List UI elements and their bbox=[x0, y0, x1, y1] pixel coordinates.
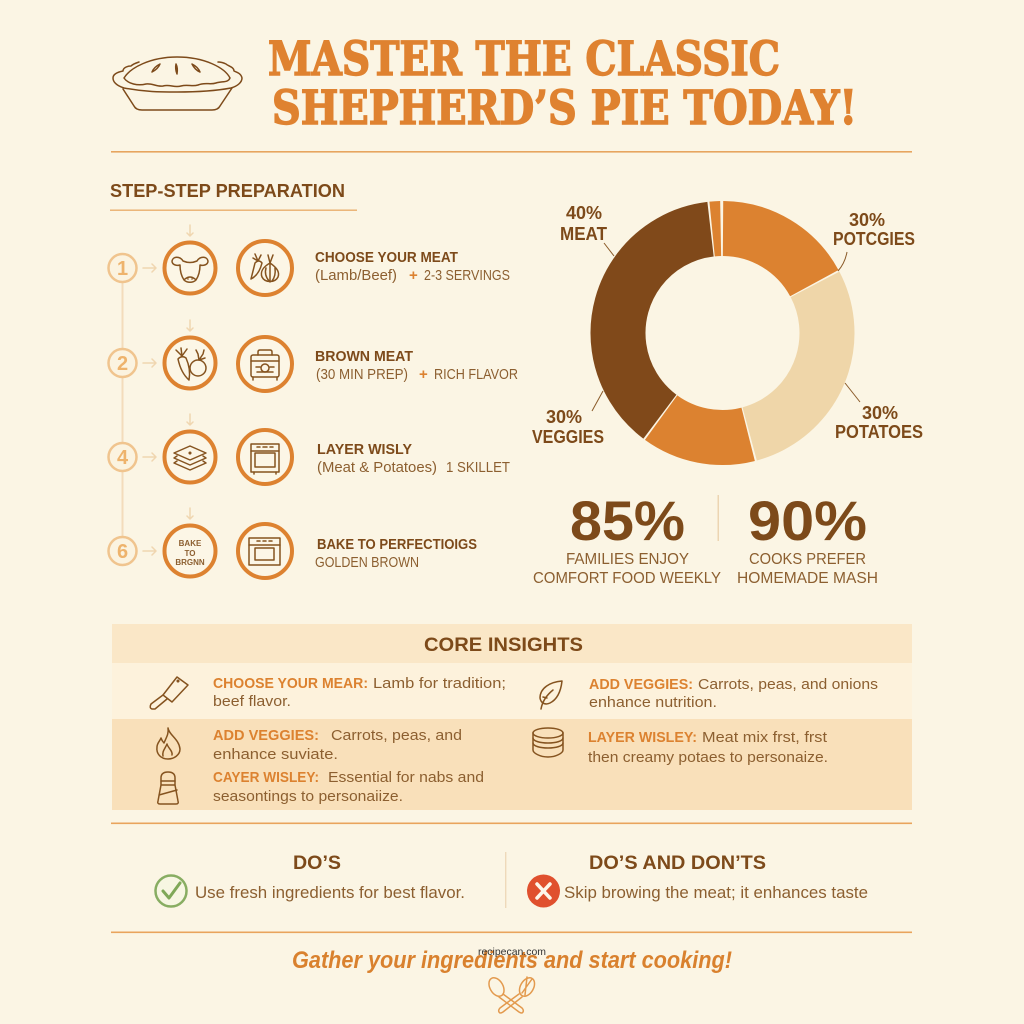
insight: add veggies right bbox=[589, 676, 878, 711]
icon: flame bbox=[157, 728, 180, 759]
insight: layer wisley: LAYER WISLEY: bbox=[588, 729, 697, 746]
step 2 text: + bbox=[419, 366, 428, 383]
icon: bake badge: TO bbox=[185, 549, 195, 558]
panel: step 2 bbox=[108, 320, 518, 391]
heading: do's and don'ts: DO’S AND DON’TS bbox=[589, 853, 766, 874]
watermark: recipecan.com bbox=[478, 946, 546, 958]
stat: 90 percent: COOKS PREFER bbox=[749, 551, 866, 568]
icon: cross bbox=[527, 874, 560, 908]
arrows step 3 bbox=[143, 414, 193, 461]
insight: add veggies left bbox=[213, 727, 462, 763]
heading: step preparation: STEP-STEP PREPARATION bbox=[110, 180, 345, 201]
insight: layer wisley bbox=[588, 729, 828, 766]
icon: stove bbox=[238, 430, 292, 484]
step 4 text: BAKE TO PERFECTIOIGS bbox=[317, 537, 477, 553]
stat: 85 percent: 85% bbox=[570, 489, 685, 552]
insight: cayer wisley bbox=[213, 769, 484, 805]
heading: core insights: CORE INSIGHTS bbox=[424, 634, 583, 656]
donut label: meat bbox=[560, 203, 614, 256]
insight: layer wisley: then creamy potaes to personaize. bbox=[588, 749, 828, 766]
insight: cayer wisley: CAYER WISLEY: bbox=[213, 769, 319, 786]
step 3 text bbox=[317, 442, 510, 476]
don't text: Skip browing the meat; it enhances taste bbox=[564, 883, 868, 902]
insight: add veggies left: Carrots, peas, and bbox=[331, 727, 462, 744]
step 2 text bbox=[315, 349, 518, 383]
panel: do's bbox=[156, 853, 465, 906]
arrows step 4 bbox=[143, 508, 193, 555]
step 2 text: BROWN MEAT bbox=[315, 349, 413, 365]
step number 6 bbox=[108, 537, 136, 565]
donut label: meat: 40% bbox=[566, 203, 602, 223]
step 1 text: 2-3 SERVINGS bbox=[424, 268, 510, 284]
panel: step 3 bbox=[108, 414, 510, 484]
icon: slow cooker bbox=[238, 337, 292, 391]
step 1 text: (Lamb/Beef) bbox=[315, 268, 397, 284]
stat: 90 percent: 90% bbox=[748, 489, 867, 552]
donut label: potatoes: POTATOES bbox=[835, 422, 923, 442]
stat: 85 percent: COMFORT FOOD WEEKLY bbox=[533, 570, 721, 587]
donut label: veggies: 30% bbox=[546, 407, 582, 427]
icon: oven bbox=[238, 524, 292, 578]
call to action: Gather your ingredients and start cooking! bbox=[292, 947, 732, 974]
insight: add veggies right: ADD VEGGIES: bbox=[589, 676, 693, 693]
icon: leaf bbox=[540, 681, 562, 709]
icon: bake badge: BAKE bbox=[179, 539, 202, 548]
do text: Use fresh ingredients for best flavor. bbox=[195, 883, 465, 902]
step 3 text: 1 SKILLET bbox=[446, 460, 510, 476]
step number 2: 2 bbox=[117, 353, 128, 375]
insight: choose your meat bbox=[213, 675, 506, 710]
icon: pie bbox=[113, 57, 242, 110]
arrows step 1 bbox=[143, 225, 193, 272]
step 3 text: (Meat & Potatoes) bbox=[317, 460, 437, 476]
stat: 90 percent bbox=[737, 489, 878, 587]
step number 2 bbox=[108, 349, 136, 377]
donut label: potatoes bbox=[835, 383, 923, 442]
stat: 85 percent bbox=[533, 489, 721, 587]
insight: cayer wisley: seasontings to personaiize. bbox=[213, 788, 403, 805]
insight: cayer wisley: Essential for nabs and bbox=[328, 769, 484, 786]
icon: bake badge bbox=[164, 526, 216, 576]
step number 1 bbox=[108, 254, 136, 282]
step 4 text bbox=[315, 537, 477, 571]
insight: add veggies right: enhance nutrition. bbox=[589, 694, 717, 711]
step 2 text: (30 MIN PREP) bbox=[316, 367, 408, 383]
timeline connector bbox=[122, 282, 124, 538]
insight: add veggies left: enhance suviate. bbox=[213, 746, 338, 763]
panel: step 1 bbox=[108, 225, 510, 295]
step number 4 bbox=[108, 443, 136, 471]
icon: salt shaker bbox=[158, 772, 178, 804]
step 1 text bbox=[315, 250, 510, 284]
step number 1: 1 bbox=[117, 258, 128, 280]
icon: cleaver bbox=[150, 677, 188, 709]
title: SHEPHERD’S PIE TODAY! bbox=[272, 81, 857, 136]
donut label: veggies bbox=[532, 391, 604, 447]
icon: check bbox=[156, 876, 186, 906]
donut label: potatoes: 30% bbox=[862, 403, 898, 423]
stat: 85 percent: FAMILIES ENJOY bbox=[566, 551, 689, 568]
step number 6: 6 bbox=[117, 541, 128, 563]
icon: carrot and onion bbox=[238, 241, 292, 295]
panel: core insights bbox=[112, 624, 912, 810]
insight: choose your meat: beef flavor. bbox=[213, 693, 291, 710]
icon: spoon and whisk bbox=[486, 975, 538, 1013]
icon: stacked layers bbox=[533, 728, 563, 757]
donut label: potgies: 30% bbox=[849, 210, 885, 230]
stat: 90 percent: HOMEMADE MASH bbox=[737, 570, 878, 587]
title bbox=[268, 32, 857, 136]
step 1 text: + bbox=[409, 267, 418, 284]
title: MASTER THE CLASSIC bbox=[268, 32, 780, 87]
step number 4: 4 bbox=[117, 447, 129, 469]
donut label: veggies: VEGGIES bbox=[532, 427, 604, 447]
step 4 text: GOLDEN BROWN bbox=[315, 555, 419, 571]
insight: layer wisley: Meat mix frst, frst bbox=[702, 729, 828, 746]
insight: add veggies left: ADD VEGGIES: bbox=[213, 727, 319, 744]
donut label: potgies bbox=[833, 210, 915, 271]
step 2 text: RICH FLAVOR bbox=[434, 367, 518, 383]
donut label: meat: MEAT bbox=[560, 224, 607, 244]
step 1 text: CHOOSE YOUR MEAT bbox=[315, 250, 458, 266]
icon: layers bbox=[164, 432, 216, 482]
donut chart bbox=[576, 187, 869, 479]
donut label: potgies: POTCGIES bbox=[833, 229, 915, 249]
icon: carrot and beet bbox=[164, 338, 216, 388]
icon: animal head bbox=[164, 242, 216, 294]
heading: do's: DO’S bbox=[293, 853, 341, 874]
icon: bake badge: BRGNN bbox=[175, 558, 205, 567]
insight: choose your meat: Lamb for tradition; bbox=[373, 675, 506, 692]
panel: don'ts bbox=[527, 853, 868, 908]
step 3 text: LAYER WISLY bbox=[317, 442, 412, 458]
panel: step 4 bbox=[108, 508, 477, 578]
insight: add veggies right: Carrots, peas, and onions bbox=[698, 676, 878, 693]
insight: choose your meat: CHOOSE YOUR MEAR: bbox=[213, 675, 368, 692]
arrows step 2 bbox=[143, 320, 193, 367]
